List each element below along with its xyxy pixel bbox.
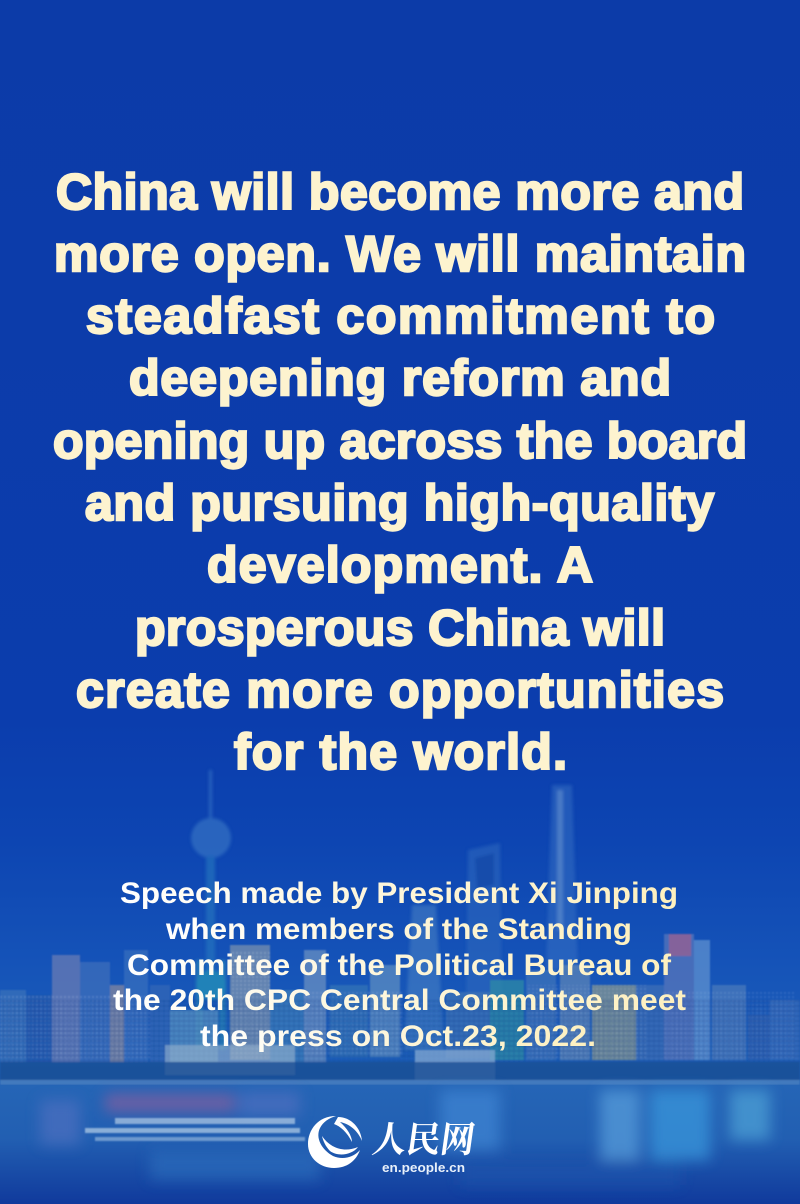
main quote: prosperous China will: [135, 600, 665, 656]
main quote: create more opportunities: [76, 662, 724, 718]
World Financial Center: [466, 843, 502, 1000]
attribution text: Committee of the Political Bureau of: [127, 949, 672, 982]
icon: crescent globe: [308, 1116, 362, 1168]
main quote: more open. We will maintain: [54, 226, 746, 282]
main quote: [53, 164, 747, 780]
Shanghai skyline illustration: [0, 770, 800, 1085]
building windows: [0, 950, 800, 1062]
river water with reflections: [0, 1085, 800, 1204]
main quote: opening up across the board: [53, 413, 747, 469]
waterfront low buildings: [165, 1045, 295, 1075]
attribution text: Speech made by President Xi Jinping: [120, 877, 678, 910]
logo url: en.people.cn: [382, 1160, 465, 1175]
boat light streaks: [85, 1118, 305, 1141]
attribution text: the press on Oct.23, 2022.: [200, 1020, 596, 1053]
Shanghai Tower: [546, 785, 578, 970]
attribution text: when members of the Standing: [165, 913, 632, 946]
near buildings: [0, 934, 800, 1085]
Far towers: [191, 770, 578, 1050]
main quote: deepening reform and: [129, 350, 671, 406]
logo: People's Daily Online: [308, 1111, 479, 1175]
main quote: for the world.: [234, 724, 567, 780]
main quote: and pursuing high-quality: [85, 475, 714, 531]
Jin Mao tower: [404, 905, 444, 1050]
main quote: China will become more and: [56, 164, 744, 220]
main quote: steadfast commitment to: [86, 288, 715, 344]
Oriental Pearl tower: [191, 770, 231, 1050]
attribution text: the 20th CPC Central Committee meet: [113, 984, 686, 1017]
logo wordmark: 人民网: [369, 1111, 479, 1163]
attribution text: [113, 877, 686, 1053]
main quote: development. A: [207, 537, 593, 593]
dark shoreline: [0, 1062, 800, 1080]
